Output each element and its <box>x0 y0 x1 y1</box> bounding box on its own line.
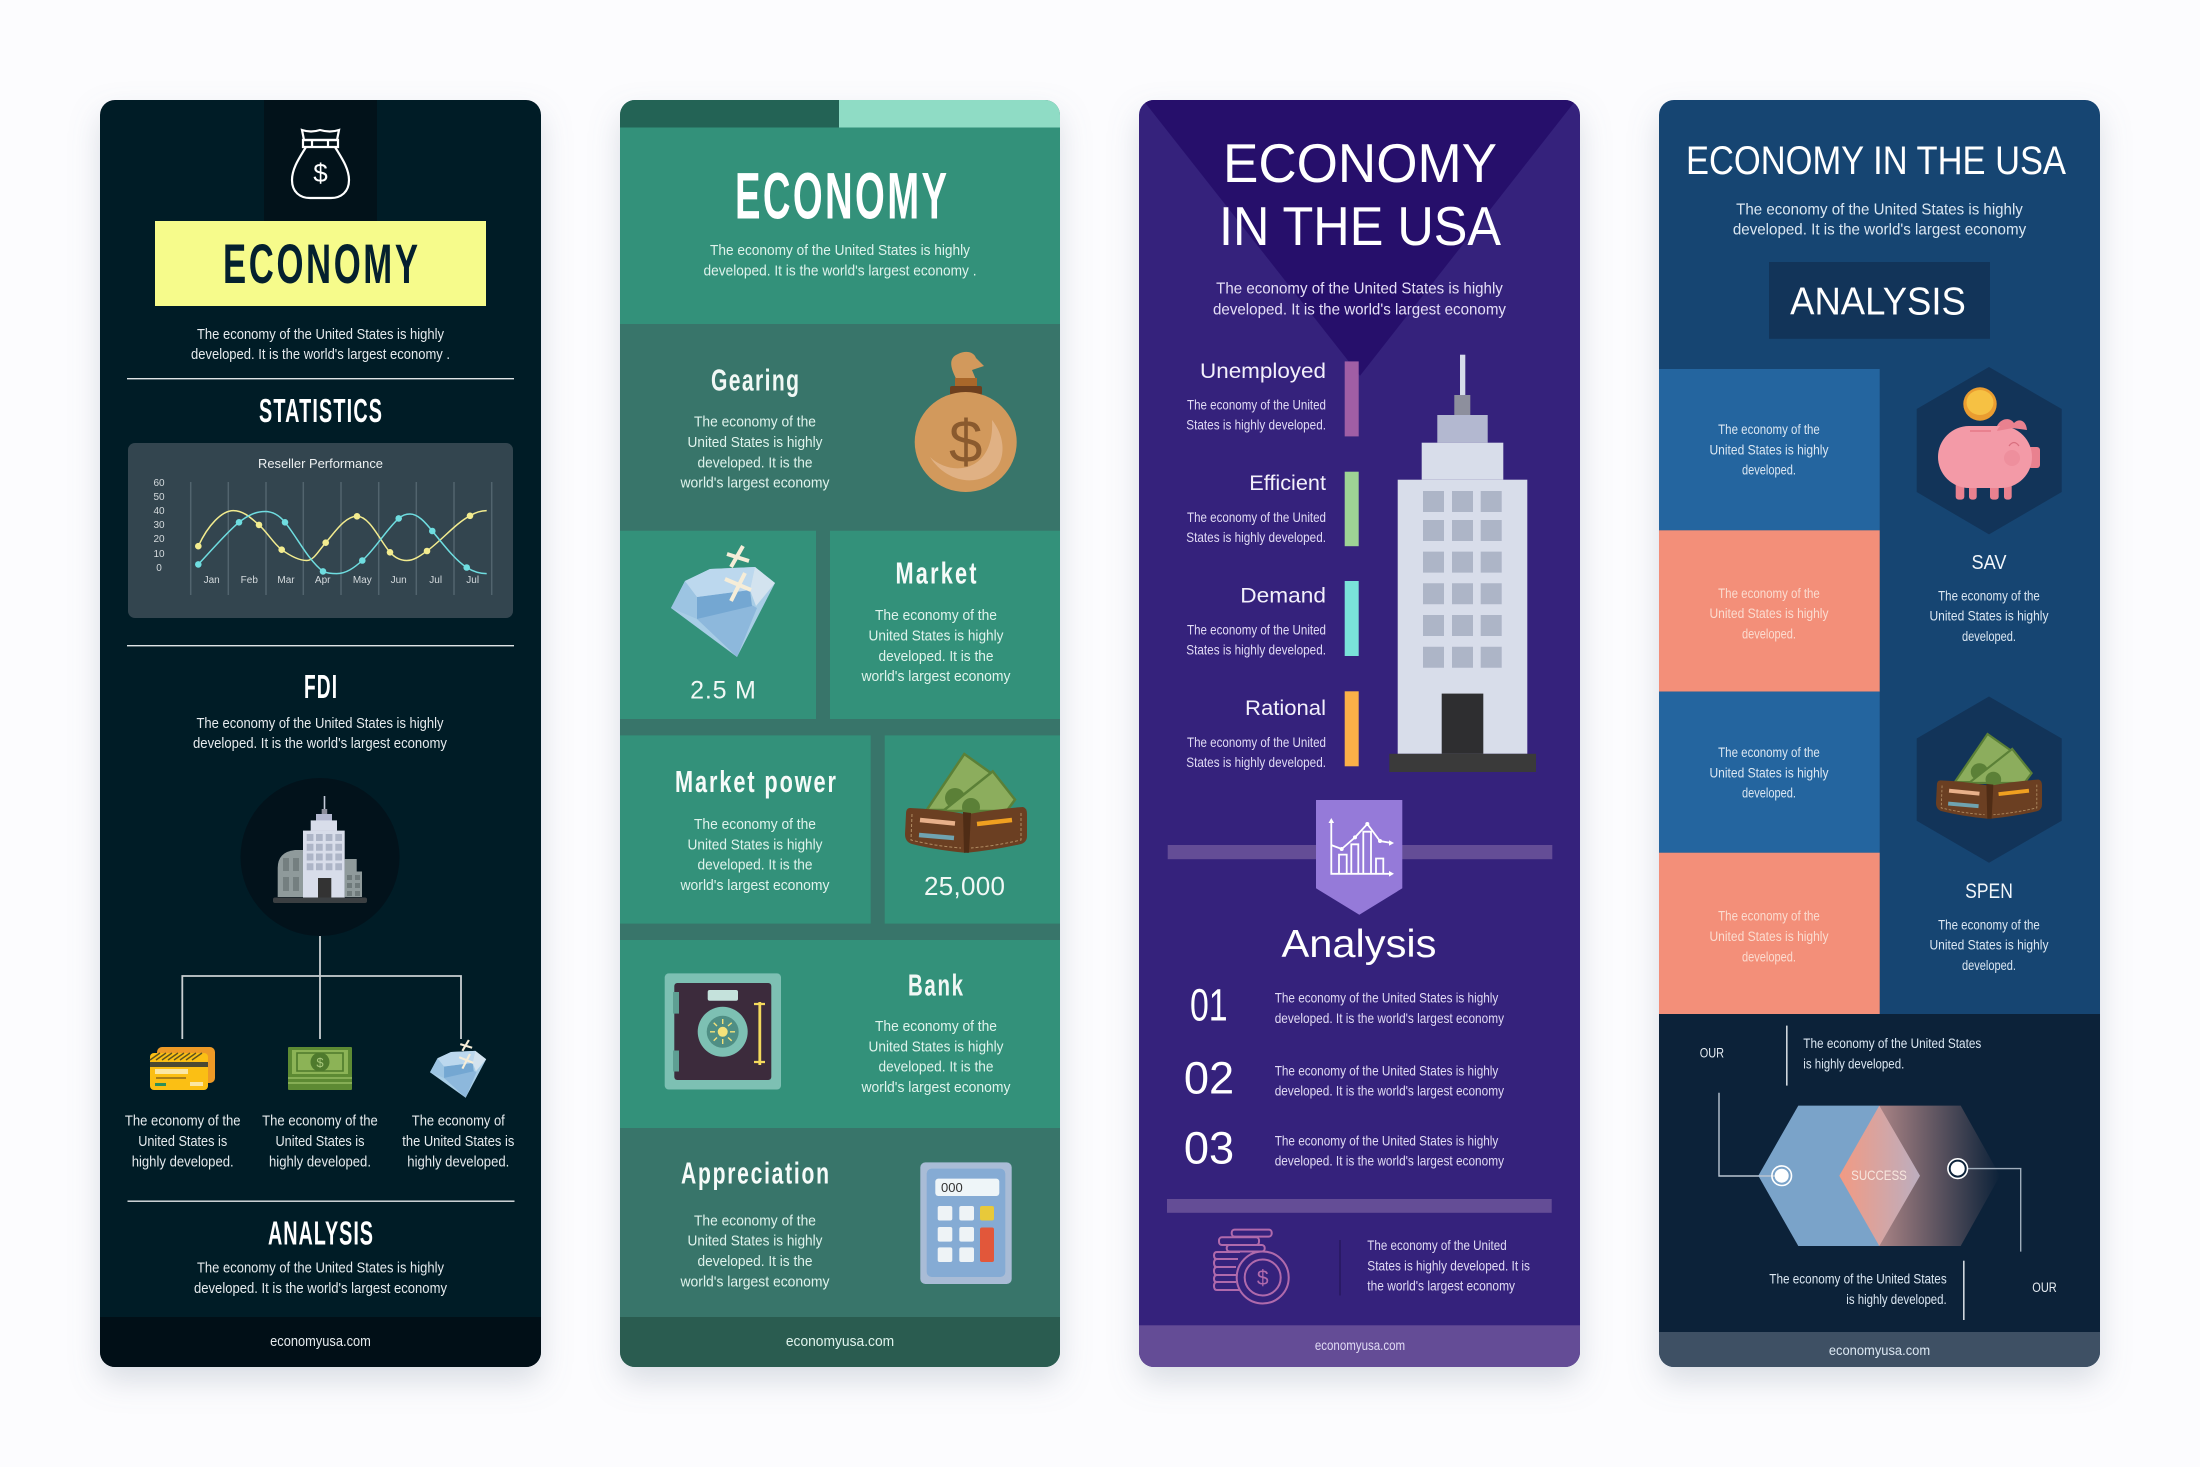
gearing text: United States is highly <box>688 435 823 451</box>
intro text <box>1733 202 2026 238</box>
note: top <box>1803 1036 1982 1071</box>
icon: city building in circle <box>240 778 400 936</box>
intro text: developed. It is the world's largest economy . <box>704 263 976 279</box>
icon: safe <box>665 973 781 1090</box>
bank text: world's largest economy <box>861 1080 1011 1096</box>
bank text: The economy of the <box>875 1019 997 1035</box>
analysis badge <box>1769 262 1990 339</box>
icon: money bag outline: $ <box>313 158 328 188</box>
block: blue 2: developed. <box>1742 786 1796 801</box>
SAV text: developed. <box>1962 629 2016 644</box>
item 03: developed. It is the world's largest economy <box>1275 1152 1504 1168</box>
title: ECONOMY <box>1223 132 1497 194</box>
line chart: reseller performance: May <box>353 575 372 586</box>
block: blue 1 <box>1659 369 1880 530</box>
item 03: The economy of the United States is highly <box>1275 1132 1498 1148</box>
market text <box>861 608 1011 685</box>
label: OUR bottom: OUR <box>2032 1280 2057 1295</box>
intro text: developed. It is the world's largest economy . <box>191 347 450 363</box>
market power text: world's largest economy <box>680 878 830 894</box>
title banner: ECONOMY <box>223 233 418 295</box>
text column: left: United States is <box>138 1134 227 1150</box>
icon: piggy bank in hexagon <box>1917 367 2062 534</box>
analysis band <box>1168 845 1552 859</box>
dark lower section <box>1659 1014 2100 1332</box>
bottom note: The economy of the United <box>1367 1237 1507 1253</box>
block: salmon 2: developed. <box>1742 949 1796 964</box>
item: efficient: Efficient <box>1249 472 1326 495</box>
item 02 <box>1184 1052 1504 1104</box>
note: top: is highly developed. <box>1803 1056 1904 1071</box>
title: IN THE USA <box>1219 195 1501 257</box>
intro text <box>191 327 450 363</box>
market power text: United States is highly <box>688 837 823 853</box>
tile: diamond <box>620 531 816 719</box>
icon: calculator <box>920 1162 1012 1284</box>
item 01 <box>1190 979 1504 1030</box>
tile: market power <box>620 735 871 924</box>
panel 1: dark economy statistics <box>100 100 541 1367</box>
item: rational <box>1186 691 1359 770</box>
FDI text <box>193 716 448 752</box>
title: ECONOMY <box>735 160 947 233</box>
label: OUR top: OUR <box>1700 1046 1724 1060</box>
footer bar <box>1139 1325 1580 1367</box>
icon: skyscraper <box>1389 355 1536 772</box>
note: bottom: is highly developed. <box>1846 1292 1947 1307</box>
line chart: reseller performance: 50 <box>153 492 165 503</box>
item: rational: The economy of the United <box>1187 734 1326 750</box>
tile: market <box>830 531 1060 719</box>
item 01: The economy of the United States is highly <box>1275 990 1498 1006</box>
item: efficient: The economy of the United <box>1187 509 1326 525</box>
heading: SAV: SAV <box>1972 552 2007 574</box>
appreciation text: The economy of the <box>694 1213 816 1229</box>
heading: SPEN: SPEN <box>1965 880 2013 903</box>
analysis text: developed. It is the world's largest economy <box>194 1281 448 1297</box>
text column: left: highly developed. <box>132 1154 234 1170</box>
market power text: developed. It is the <box>698 858 812 874</box>
footer bar <box>620 1317 1060 1367</box>
intro text: developed. It is the world's largest economy <box>1733 222 2026 238</box>
block: blue 2: The economy of the <box>1718 745 1820 760</box>
icon: diamond <box>430 1040 486 1098</box>
icon: wallet in hexagon <box>1917 696 2062 863</box>
FDI text: developed. It is the world's largest economy <box>193 736 448 752</box>
heading: analysis: ANALYSIS <box>268 1214 373 1252</box>
line chart: reseller performance: Jul <box>466 575 479 586</box>
item: unemployed <box>1186 360 1359 436</box>
tile: wallet <box>885 735 1060 924</box>
heading: analysis: Analysis <box>1282 923 1436 966</box>
title: ECONOMY IN THE USA <box>1686 139 2066 183</box>
intro text: The economy of the United States is highly <box>1736 202 2023 218</box>
SPEN text: developed. <box>1962 958 2016 973</box>
SPEN text <box>1930 917 2049 973</box>
heading: gearing: Gearing <box>711 363 799 398</box>
icon: wallet <box>905 754 1027 853</box>
item: unemployed: States is highly developed. <box>1186 416 1326 432</box>
line chart: reseller performance: 20 <box>153 534 165 545</box>
block: salmon 1: The economy of the <box>1718 586 1820 601</box>
text column: right: The economy of <box>412 1114 506 1130</box>
text column: left: The economy of the <box>125 1114 241 1130</box>
icon: diamond <box>671 546 775 657</box>
panel 4: blue economy analysis <box>1659 100 2100 1367</box>
note: bottom: The economy of the United States <box>1769 1272 1947 1286</box>
text column: middle: The economy of the <box>262 1114 378 1130</box>
intro text: The economy of the United States is highly <box>710 243 971 259</box>
SAV text <box>1930 588 2049 644</box>
gearing text: world's largest economy <box>680 476 830 492</box>
success hexagon diagram <box>1719 1093 2021 1252</box>
line chart: reseller performance: Apr <box>315 575 331 586</box>
market text: developed. It is the <box>878 649 994 665</box>
text column: left <box>125 1114 241 1170</box>
item: demand <box>1186 581 1359 658</box>
tree connector lines <box>182 936 461 1039</box>
analysis text <box>194 1261 448 1297</box>
bank text: developed. It is the <box>878 1060 994 1076</box>
market power text: The economy of the <box>694 817 816 833</box>
footer url: economyusa.com <box>786 1334 894 1350</box>
appreciation text: developed. It is the <box>698 1254 812 1270</box>
item 02: The economy of the United States is highly <box>1275 1062 1498 1078</box>
stat: 25,000: 25,000 <box>924 871 1005 901</box>
heading: bank: Bank <box>908 967 963 1002</box>
success hexagon diagram: SUCCESS <box>1851 1167 1907 1183</box>
SAV text: The economy of the <box>1938 588 2040 603</box>
panel 1 footer bar <box>100 1317 541 1367</box>
line chart: reseller performance: 40 <box>153 506 165 517</box>
gearing text: The economy of the <box>694 415 816 431</box>
bottom note: the world's largest economy <box>1367 1278 1515 1294</box>
FDI text: The economy of the United States is highly <box>196 716 444 732</box>
heading: market: Market <box>896 556 977 590</box>
SAV text: United States is highly <box>1930 609 2049 624</box>
block: blue 1: developed. <box>1742 463 1796 478</box>
footer url: economyusa.com <box>1315 1337 1405 1353</box>
title banner <box>155 221 486 306</box>
item: rational: States is highly developed. <box>1186 754 1326 770</box>
item 02: 02 <box>1184 1052 1234 1104</box>
appreciation text: United States is highly <box>688 1234 823 1250</box>
market text: United States is highly <box>868 629 1004 645</box>
analysis badge: ANALYSIS <box>1790 280 1966 323</box>
bank text: United States is highly <box>868 1039 1004 1055</box>
intro text: The economy of the United States is highly <box>1216 280 1503 298</box>
item: unemployed: Unemployed <box>1200 360 1326 383</box>
badge: chart icon <box>1316 800 1402 915</box>
item 02: developed. It is the world's largest economy <box>1275 1082 1504 1098</box>
block: salmon 1: United States is highly <box>1710 606 1829 621</box>
line chart: reseller performance: Mar <box>277 575 295 586</box>
title <box>1219 132 1501 257</box>
panel 3: purple economy in the USA <box>1139 100 1580 1367</box>
item 03: 03 <box>1184 1122 1234 1174</box>
stat: 2.5 M: 2.5 M <box>690 677 756 705</box>
icon: money bag: $ <box>949 408 982 475</box>
block: salmon 1 <box>1659 530 1880 692</box>
icon: money bag <box>915 352 1017 492</box>
footer url: economyusa.com <box>270 1334 371 1350</box>
heading: appreciation: Appreciation <box>681 1156 829 1191</box>
item 01: developed. It is the world's largest economy <box>1275 1010 1504 1026</box>
intro text <box>704 243 976 279</box>
text column: middle: United States is <box>276 1134 364 1150</box>
block: blue 2: United States is highly <box>1710 765 1829 780</box>
line chart: reseller performance: Jun <box>391 575 407 586</box>
appreciation text: world's largest economy <box>680 1274 830 1290</box>
heading: market power: Market power <box>675 764 836 799</box>
block: salmon 1: developed. <box>1742 626 1796 642</box>
line chart: reseller performance: Jul <box>429 575 442 586</box>
line chart: reseller performance: Feb <box>241 575 258 586</box>
line chart: reseller performance: 60 <box>153 478 165 489</box>
icon: banknote stack <box>288 1047 352 1090</box>
text column: right: highly developed. <box>407 1154 509 1170</box>
bottom note: States is highly developed. It is <box>1367 1257 1530 1273</box>
item 03 <box>1184 1122 1504 1174</box>
tile: header <box>620 128 1060 324</box>
block: blue 1: The economy of the <box>1718 422 1820 437</box>
line chart: reseller performance: 0 <box>156 563 162 574</box>
line chart: reseller performance: 10 <box>153 549 165 560</box>
intro text <box>1213 280 1506 318</box>
note: bottom <box>1769 1272 1947 1307</box>
item: demand: Demand <box>1240 584 1326 608</box>
item: unemployed: The economy of the United <box>1187 396 1326 412</box>
heading: statistics: STATISTICS <box>259 392 382 429</box>
line chart: reseller performance <box>128 443 513 618</box>
heading: FDI: FDI <box>304 669 337 705</box>
bank text <box>861 1019 1011 1096</box>
item: demand: States is highly developed. <box>1186 642 1326 658</box>
item: rational: Rational <box>1245 697 1326 720</box>
appreciation text <box>680 1213 830 1290</box>
analysis text: The economy of the United States is highly <box>197 1261 445 1277</box>
block: salmon 2: United States is highly <box>1710 929 1829 944</box>
line chart: reseller performance: Reseller Performance <box>258 456 383 471</box>
footer bar <box>1659 1332 2100 1367</box>
line chart: reseller performance: 30 <box>153 520 165 531</box>
panel 2: green economy tiles <box>620 100 1060 1367</box>
market text: The economy of the <box>875 608 997 624</box>
icon: calculator: 000 <box>941 1180 963 1195</box>
block: salmon 2: The economy of the <box>1718 909 1820 924</box>
intro text: The economy of the United States is highly <box>197 327 445 343</box>
intro text: developed. It is the world's largest economy <box>1213 301 1506 318</box>
panel 1 top icon tab <box>264 100 377 221</box>
text column: right <box>402 1114 514 1170</box>
item: demand: The economy of the United <box>1187 622 1326 638</box>
text column: middle <box>262 1114 378 1170</box>
text column: middle: highly developed. <box>269 1154 371 1170</box>
market text: world's largest economy <box>861 669 1011 685</box>
item: efficient <box>1186 472 1359 546</box>
gearing text <box>680 415 830 492</box>
block: blue 1: United States is highly <box>1710 442 1829 457</box>
tile: bank <box>620 940 1060 1128</box>
block: salmon 2 <box>1659 853 1880 1014</box>
block: blue 2 <box>1659 692 1880 853</box>
icon: money bag outline <box>292 130 349 198</box>
text column: right: the United States is <box>402 1134 514 1150</box>
SPEN text: The economy of the <box>1938 917 2040 932</box>
SPEN text: United States is highly <box>1930 938 2049 953</box>
icon: banknote stack: $ <box>316 1055 324 1070</box>
item 01: 01 <box>1190 979 1228 1030</box>
top strips <box>620 100 1060 128</box>
line chart: reseller performance: Jan <box>204 575 220 586</box>
bottom note <box>1367 1237 1530 1294</box>
footer url: economyusa.com <box>1829 1343 1930 1358</box>
item: efficient: States is highly developed. <box>1186 529 1326 545</box>
dark top triangle <box>1143 100 1576 376</box>
icon: credit cards <box>150 1047 215 1090</box>
note: top: The economy of the United States <box>1803 1036 1982 1051</box>
gearing text: developed. It is the <box>698 455 812 471</box>
icon: coin stack: $ <box>1257 1267 1269 1290</box>
icon: coin stack <box>1214 1230 1289 1304</box>
market power text <box>680 817 830 894</box>
